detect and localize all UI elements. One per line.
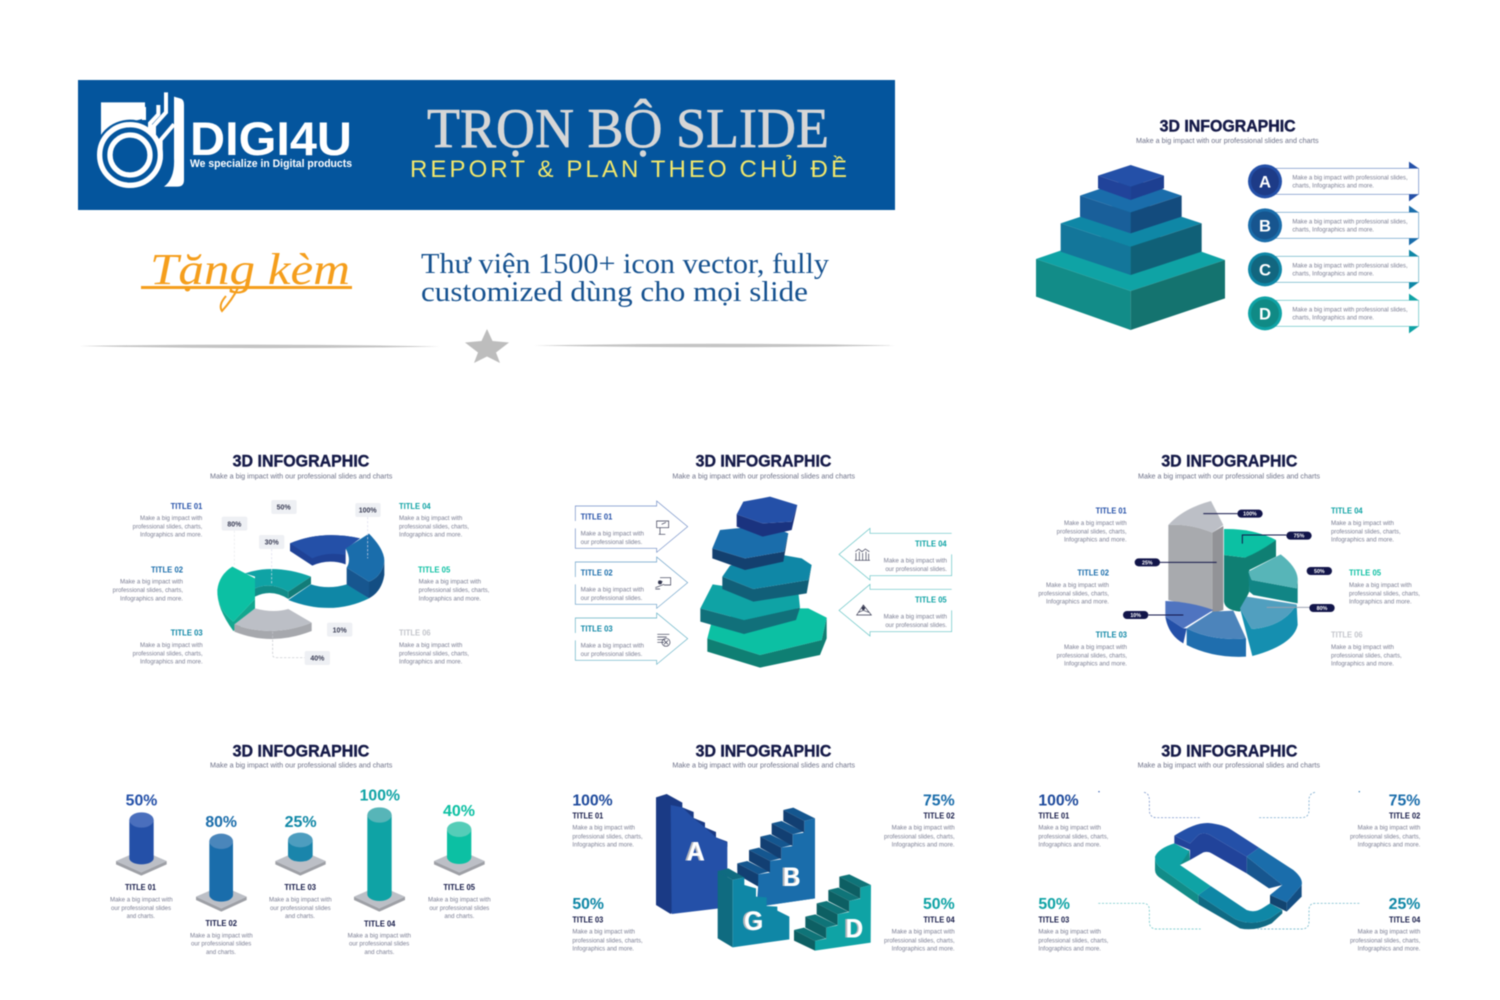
pill 10% [1123, 611, 1148, 619]
stat 50% title 03 [572, 896, 643, 952]
stat 75% title 02: Infographics and more. [892, 841, 955, 848]
text block title 03: Infographics and more. [140, 658, 203, 665]
dashed connectors [1098, 791, 1360, 929]
cylinder 4: 100% [348, 788, 411, 956]
text block title 02: TITLE 02 [1077, 569, 1110, 578]
value tag 100% [355, 503, 381, 517]
cylinder 4: 100%: our professional slides [349, 941, 409, 948]
hexagon stack [700, 497, 827, 668]
panel: stacked hexagons [575, 452, 952, 668]
heading: 3D INFOGRAPHIC [1160, 116, 1296, 135]
cylinder 3: 25% [269, 814, 332, 920]
text block title 03: TITLE 03 [171, 629, 203, 638]
icon: Digi4U logo mark [95, 92, 184, 190]
subheading: Make a big impact with our professional slides and charts [210, 761, 393, 770]
text block title 06: TITLE 06 [1331, 631, 1363, 640]
text block title 06: professional slides, charts, [1331, 652, 1402, 659]
arrow callout title 05: Make a big impact with [884, 614, 947, 621]
logo tagline: We specialize in Digital products [190, 158, 352, 170]
value tag 50% [271, 500, 297, 514]
value tag 10%: 10% [333, 627, 347, 634]
pill 100%: 100% [1243, 512, 1257, 518]
pill 50%: 50% [1314, 569, 1325, 575]
text block title 06: TITLE 06 [399, 629, 431, 638]
stat 100% title 01: TITLE 01 [572, 811, 604, 820]
callout C: charts, Infographics and more. [1292, 270, 1374, 277]
callout C: Make a big impact with professional slides, [1292, 262, 1408, 269]
callout A: charts, Infographics and more. [1292, 182, 1374, 189]
cylinder 4: 100%: Make a big impact with [348, 932, 411, 939]
stairs D: D [844, 914, 862, 944]
subheading: Make a big impact with our professional slides and charts [210, 471, 393, 480]
stat 75% title 02: professional slides, charts, [1350, 833, 1421, 840]
subheading: Make a big impact with our professional slides and charts [1136, 136, 1319, 145]
icon: bar group [855, 549, 870, 560]
callout D [1248, 294, 1419, 333]
3D ring [1155, 823, 1302, 929]
text block title 05 [418, 566, 490, 602]
stat 100% title 01: TITLE 01 [1038, 811, 1070, 820]
cylinder 4: 100%: and charts. [364, 949, 395, 956]
value tag 30% [259, 535, 284, 549]
logo wordmark: DIGI4U [190, 112, 352, 165]
leader lines [1148, 514, 1309, 615]
text block title 06 [399, 629, 469, 665]
icon: chart board [655, 578, 671, 589]
cylinder 3: 25%: and charts. [285, 913, 315, 920]
arrow callout title 02 [575, 557, 688, 608]
pill 75%: 75% [1294, 534, 1305, 540]
text block title 06: Make a big impact with [399, 642, 463, 649]
callout C: C [1259, 260, 1271, 279]
cylinder 4: 100%: 100% [360, 788, 400, 805]
stat 75% title 02: Make a big impact with [1358, 825, 1421, 832]
arrow callout title 04: TITLE 04 [915, 540, 947, 549]
text block title 02 [1038, 569, 1110, 606]
arrow callout title 05: our professional slides. [885, 622, 947, 629]
stat 75% title 02: Make a big impact with [892, 825, 955, 832]
stat 25% title 04: TITLE 04 [1389, 915, 1421, 924]
arrow callout title 05: TITLE 05 [915, 596, 947, 605]
arrow callout title 02: our professional slides. [581, 595, 643, 602]
pill 75% [1286, 532, 1312, 540]
cylinder 1: 50%: 50% [126, 793, 157, 810]
value tag 100%: 100% [359, 508, 377, 515]
stat 50% title 04: Make a big impact with [892, 929, 955, 936]
stat 100% title 01: Make a big impact with [1038, 825, 1101, 832]
text block title 04: professional slides, charts, [1331, 528, 1401, 535]
cylinder 1: 50%: TITLE 01 [125, 883, 157, 892]
stat 25% title 04 [1350, 896, 1421, 952]
text block title 04: Infographics and more. [399, 532, 463, 539]
subheading: Make a big impact with our professional slides and charts [672, 761, 855, 770]
heading: 3D INFOGRAPHIC [696, 452, 831, 471]
callout C [1248, 250, 1419, 289]
pill 50% [1307, 567, 1332, 575]
cylinder 2: 80%: TITLE 02 [205, 919, 238, 928]
cylinder 2: 80%: Make a big impact with [190, 932, 253, 939]
cylinder 5: 40% [428, 803, 491, 920]
value tag 10% [327, 623, 352, 637]
text block title 01: Infographics and more. [1064, 537, 1127, 544]
text block title 01: TITLE 01 [171, 502, 203, 511]
icon: data gear [657, 634, 670, 646]
arrow callout title 02: TITLE 02 [581, 569, 613, 578]
text block title 03 [133, 629, 203, 665]
callout D: charts, Infographics and more. [1292, 314, 1374, 321]
heading: 3D INFOGRAPHIC [1161, 742, 1297, 761]
stat 50% title 03: 50% [572, 896, 604, 913]
stairs D: D [846, 914, 863, 944]
arrow callout title 01: Make a big impact with [581, 531, 644, 538]
arrow callout title 03: Make a big impact with [581, 643, 644, 650]
text block title 02: TITLE 02 [151, 566, 184, 575]
text block title 04: Infographics and more. [1331, 537, 1394, 544]
text block title 02: professional slides, charts, [1038, 590, 1109, 597]
text block title 06: Make a big impact with [1331, 644, 1394, 651]
stat 50% title 04: professional slides, charts, [884, 937, 955, 944]
cylinder 3: 25%: Make a big impact with [269, 896, 332, 903]
cylinder 5: 40%: 40% [443, 803, 475, 820]
panel: 3D donut chart [113, 452, 490, 665]
stat 75% title 02: 75% [923, 793, 955, 810]
pill 80% [1309, 604, 1335, 612]
text block title 01: TITLE 01 [1096, 507, 1127, 516]
stat 75% title 02: TITLE 02 [923, 811, 955, 820]
cylinder 5: 40%: TITLE 05 [443, 883, 476, 892]
text block title 02 [113, 566, 184, 602]
text block title 01 [1057, 507, 1127, 544]
cylinder 3: 25%: TITLE 03 [284, 883, 317, 892]
text block title 04 [1331, 507, 1401, 544]
heading: 3D INFOGRAPHIC [1161, 452, 1297, 471]
text block title 06: Infographics and more. [399, 658, 463, 665]
stat 100% title 01: Make a big impact with [572, 825, 635, 832]
stat 75% title 02 [1350, 793, 1421, 848]
cylinder 2: 80%: and charts. [206, 949, 236, 956]
text block title 05: professional slides, charts, [1349, 590, 1420, 597]
callout A: Make a big impact with professional slides, [1292, 174, 1408, 181]
pill 80%: 80% [1317, 606, 1328, 612]
divider with star [79, 329, 895, 363]
text block title 04: Make a big impact with [399, 515, 463, 522]
stairs C: G [742, 906, 762, 936]
stat 75% title 02 [884, 793, 955, 848]
text block title 01: professional slides, charts, [133, 523, 203, 530]
text block title 01 [133, 502, 203, 539]
stat 100% title 01: Infographics and more. [1038, 841, 1101, 848]
heading: 3D INFOGRAPHIC [233, 742, 369, 761]
stat 100% title 01 [572, 793, 643, 848]
stairs B: B [781, 862, 799, 892]
stat 50% title 03 [1038, 896, 1109, 952]
cylinder 5: 40%: our professional slides [429, 905, 489, 912]
text block title 02: Make a big impact with [120, 579, 183, 586]
stat 50% title 03: Infographics and more. [1038, 945, 1101, 952]
text block title 04 [399, 502, 469, 539]
stat 50% title 03: TITLE 03 [1038, 915, 1070, 924]
stat 100% title 01: 100% [572, 793, 613, 810]
cylinder 3: 25%: our professional slides [270, 905, 331, 912]
text block title 01: professional slides, charts, [1057, 528, 1127, 535]
stat 100% title 01: professional slides, charts, [572, 833, 643, 840]
stat 25% title 04: Make a big impact with [1358, 929, 1421, 936]
panel: isometric ring [1038, 742, 1421, 952]
stat 50% title 03: 50% [1038, 896, 1070, 913]
cylinder 5: 40%: Make a big impact with [428, 896, 491, 903]
text block title 03: professional slides, charts, [1057, 652, 1127, 659]
stat 100% title 01: 100% [1038, 793, 1079, 810]
text block title 04: professional slides, charts, [399, 523, 469, 530]
icon: network [857, 605, 871, 615]
text block title 03: Infographics and more. [1064, 660, 1127, 667]
text block title 05: Make a big impact with [1349, 582, 1412, 589]
text block title 03: Make a big impact with [140, 642, 203, 649]
stairs C [718, 868, 789, 947]
stat 75% title 02: professional slides, charts, [884, 833, 955, 840]
cylinder 4: 100%: TITLE 04 [364, 920, 396, 929]
cylinder 1: 50%: and charts. [127, 913, 155, 920]
text block title 05: Make a big impact with [419, 579, 481, 586]
text block title 06: professional slides, charts, [399, 650, 469, 657]
stat 25% title 04: 25% [1389, 896, 1420, 913]
arrow callout title 03 [575, 613, 688, 664]
value tag 80% [222, 517, 247, 531]
cylinder 1: 50%: our professional slides [111, 905, 171, 912]
value tag 40% [305, 651, 330, 665]
banner subtitle: REPORT & PLAN THEO CHỦ ĐỀ [410, 154, 847, 183]
panel: 3D pie chart [1038, 452, 1420, 667]
banner title: TRỌN BỘ SLIDE [427, 97, 829, 160]
stat 100% title 01: Infographics and more. [572, 841, 634, 848]
cylinder 2: 80% [190, 814, 253, 956]
cylinder 5: 40%: and charts. [444, 913, 475, 920]
icon: presentation board [657, 521, 669, 534]
arrow callout title 01: TITLE 01 [581, 513, 613, 522]
stat 50% title 03: professional slides, charts, [1038, 937, 1109, 944]
text block title 03: professional slides, charts, [133, 650, 203, 657]
pill 25%: 25% [1142, 560, 1153, 566]
stat 50% title 03: TITLE 03 [572, 915, 604, 924]
stairs A: A [687, 837, 705, 867]
text block title 04: TITLE 04 [399, 502, 431, 511]
stat 75% title 02: Infographics and more. [1358, 841, 1421, 848]
subheading: Make a big impact with our professional slides and charts [1138, 471, 1320, 480]
stairs B [737, 808, 815, 907]
callout B: charts, Infographics and more. [1292, 226, 1374, 233]
heading: 3D INFOGRAPHIC [696, 742, 831, 761]
arrow callout title 03: TITLE 03 [581, 625, 613, 634]
stat 50% title 03: Infographics and more. [572, 945, 634, 952]
stairs A [656, 794, 727, 914]
callout D: D [1259, 304, 1271, 323]
script heading: Tặng kèm [141, 245, 352, 311]
promo text: Thư viện 1500+ icon vector, fully [421, 248, 830, 280]
callout B: Make a big impact with professional slides, [1292, 218, 1408, 225]
text block title 02: Infographics and more. [120, 595, 183, 602]
text block title 02: Infographics and more. [1046, 599, 1109, 606]
leader lines [234, 517, 368, 658]
panel: pyramid A-D [1036, 116, 1419, 333]
stat 50% title 04 [884, 896, 955, 952]
text block title 03: Make a big impact with [1064, 644, 1127, 651]
text block title 03: TITLE 03 [1096, 631, 1128, 640]
cylinder 3: 25%: 25% [285, 814, 317, 831]
arrow callout title 04: Make a big impact with [884, 558, 947, 565]
stat 100% title 01 [1038, 793, 1109, 848]
panel: cylinder bars [110, 742, 491, 956]
cylinder 1: 50% [110, 793, 173, 920]
callout A [1248, 162, 1419, 201]
value tag 40%: 40% [310, 656, 325, 663]
text block title 06 [1331, 631, 1402, 667]
pill 10%: 10% [1130, 613, 1141, 619]
stat 75% title 02: TITLE 02 [1389, 811, 1421, 820]
stairs A: A [685, 837, 703, 867]
arrow callout title 05 [839, 584, 952, 636]
callout D: Make a big impact with professional slides, [1292, 306, 1408, 313]
stat 100% title 01: professional slides, charts, [1038, 833, 1109, 840]
text block title 02: Make a big impact with [1046, 582, 1109, 589]
arrow callout title 02: Make a big impact with [581, 587, 644, 594]
pie chart [1165, 501, 1298, 657]
subheading: Make a big impact with our professional slides and charts [1138, 761, 1320, 770]
value tag 30%: 30% [265, 540, 279, 547]
text block title 05: TITLE 05 [1349, 569, 1382, 578]
stat 50% title 03: Make a big impact with [572, 929, 635, 936]
arrow callout title 01: our professional slides. [581, 539, 643, 546]
arrow callout title 04: our professional slides. [885, 566, 947, 573]
stat 25% title 04: professional slides, charts, [1350, 937, 1421, 944]
text block title 03 [1057, 631, 1128, 667]
stat 25% title 04: Infographics and more. [1358, 945, 1421, 952]
stat 50% title 03: Make a big impact with [1038, 929, 1101, 936]
panel: stairs ABCD [572, 742, 955, 952]
callout A: A [1259, 172, 1271, 191]
stat 75% title 02: 75% [1389, 793, 1420, 810]
arrow callout title 03: our professional slides. [581, 651, 643, 658]
text block title 05: Infographics and more. [1349, 599, 1412, 606]
cylinder 1: 50%: Make a big impact with [110, 896, 173, 903]
stat 50% title 04: TITLE 04 [923, 915, 955, 924]
text block title 04: TITLE 04 [1331, 507, 1363, 516]
callout B [1248, 206, 1419, 245]
cylinder 2: 80%: 80% [205, 814, 237, 831]
stat 50% title 04: 50% [923, 896, 955, 913]
arrow callout title 04 [839, 528, 952, 580]
promo text [421, 248, 830, 308]
arrow callout title 01 [575, 501, 688, 552]
stairs D [794, 874, 871, 951]
text block title 01: Make a big impact with [140, 515, 203, 522]
text block title 05: TITLE 05 [418, 566, 451, 575]
text block title 04: Make a big impact with [1331, 520, 1394, 527]
stairs C: G [744, 906, 763, 936]
script heading: Tặng kèm: Tặng kèm [150, 245, 350, 294]
text block title 05 [1349, 569, 1420, 606]
heading: 3D INFOGRAPHIC [233, 452, 369, 471]
banner [78, 80, 895, 210]
stairs B: B [783, 862, 801, 892]
text block title 05: Infographics and more. [419, 595, 481, 602]
value tag 50%: 50% [277, 505, 291, 512]
3D stepped pyramid [1036, 165, 1225, 330]
text block title 05: professional slides, charts, [419, 587, 490, 594]
promo text: customized dùng cho mọi slide [421, 276, 808, 308]
value tag 80%: 80% [227, 521, 242, 528]
stat 50% title 03: professional slides, charts, [572, 937, 643, 944]
pill 25% [1135, 558, 1160, 566]
text block title 01: Make a big impact with [1064, 520, 1127, 527]
subheading: Make a big impact with our professional slides and charts [672, 471, 855, 480]
text block title 02: professional slides, charts, [113, 587, 183, 594]
stat 50% title 04: Infographics and more. [892, 945, 955, 952]
pill 100% [1237, 510, 1263, 518]
callout B: B [1259, 216, 1271, 235]
text block title 01: Infographics and more. [140, 532, 203, 539]
donut chart [217, 534, 384, 639]
text block title 06: Infographics and more. [1331, 660, 1394, 667]
cylinder 2: 80%: our professional slides [191, 941, 251, 948]
